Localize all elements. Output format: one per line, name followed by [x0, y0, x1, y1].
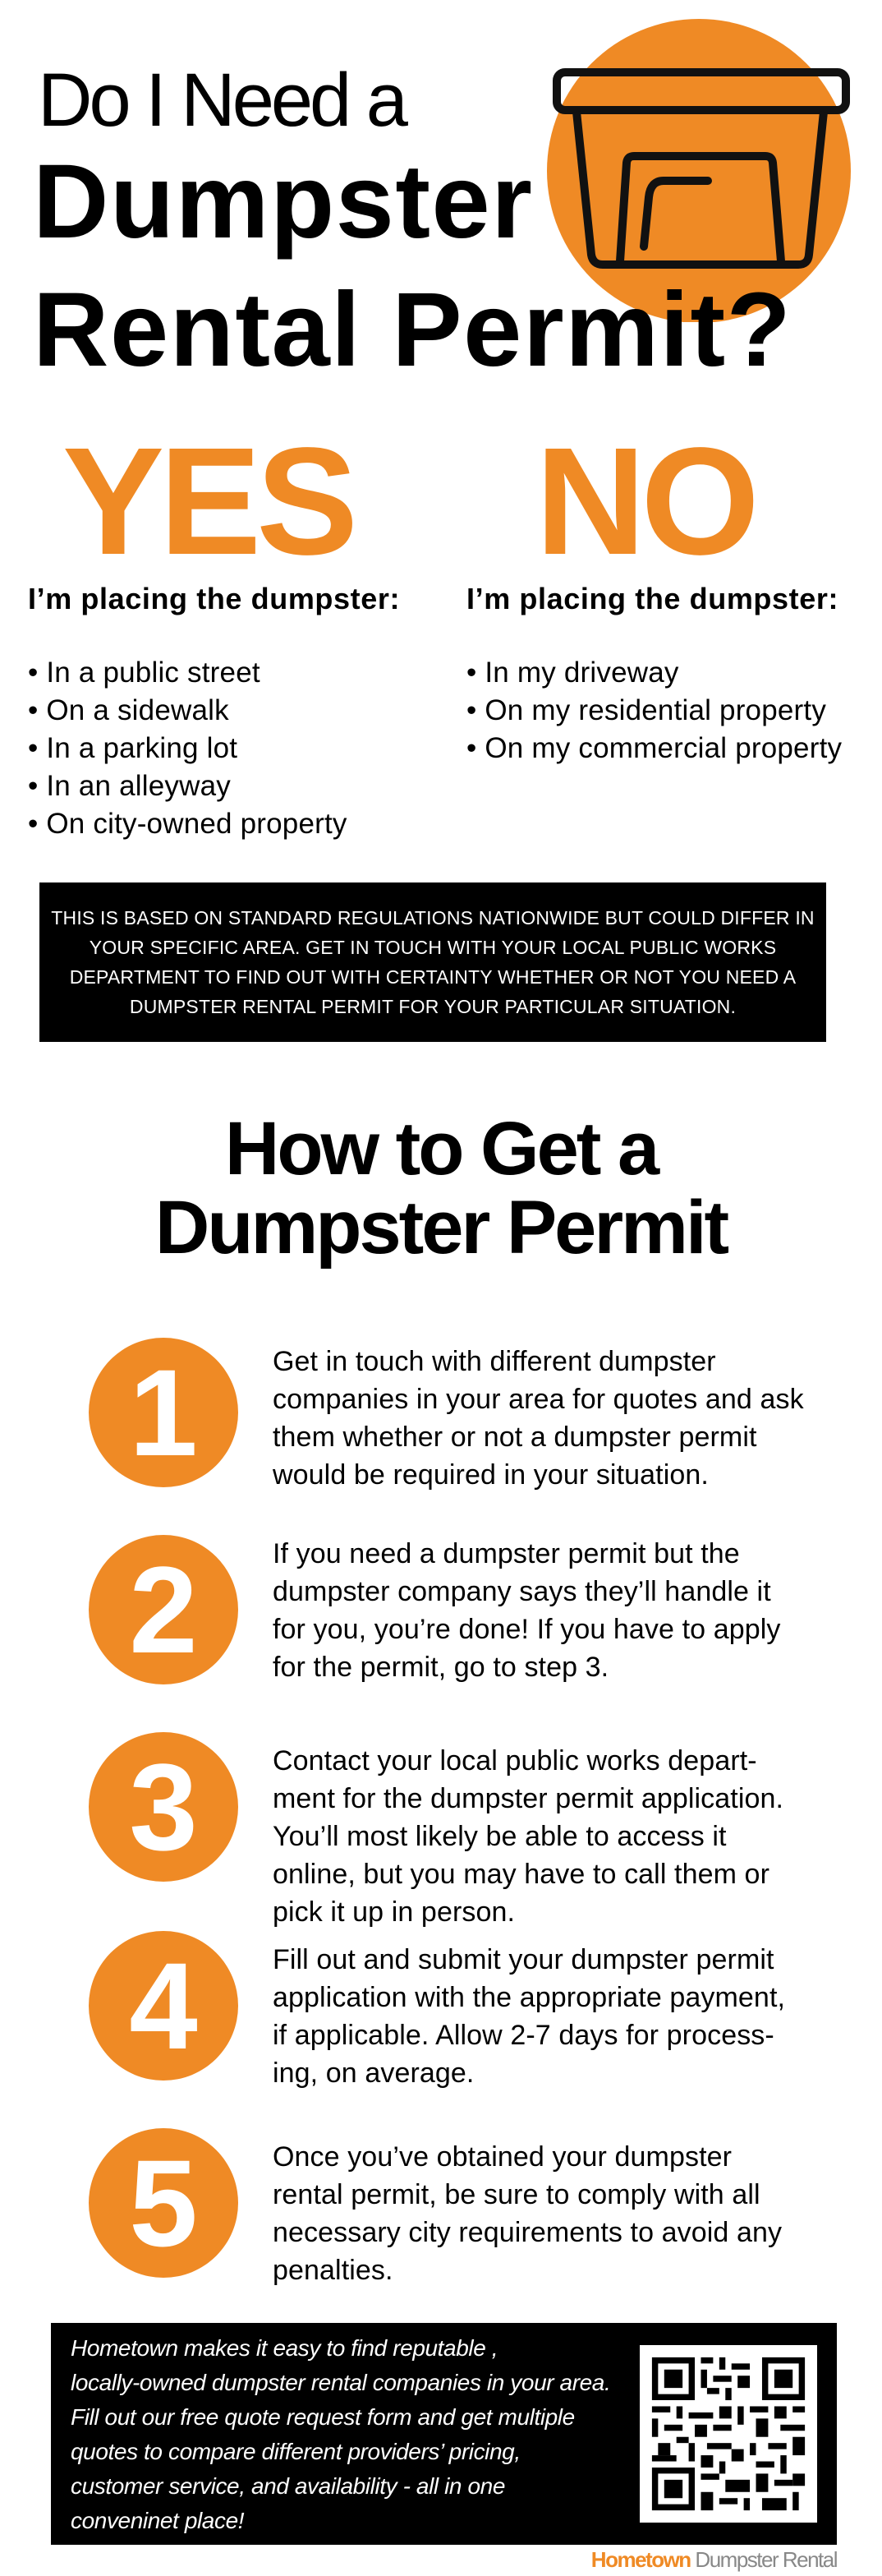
step 4	[89, 1931, 785, 2089]
step 2: If you need a dumpster permit but the	[273, 1538, 740, 1569]
step 2: for you, you’re done! If you have to apply	[273, 1614, 780, 1645]
disclaimer box: THIS IS BASED ON STANDARD REGULATIONS NATIONWIDE BUT COULD DIFFER IN	[51, 907, 815, 929]
footer text: conveninet place!	[71, 2508, 244, 2533]
panel: no list	[466, 582, 842, 764]
heading: NO: NO	[535, 417, 755, 587]
text: pick it up in person.	[273, 1896, 515, 1928]
step 2: 2	[129, 1541, 198, 1679]
step 2	[89, 1535, 780, 1684]
heading: how to get a dumpster permit	[155, 1107, 728, 1270]
panel: yes list	[28, 582, 400, 840]
panel: yes list: • In a public street	[28, 657, 260, 689]
footer text: locally-owned dumpster rental companies in your area.	[71, 2370, 610, 2395]
heading: how to get a dumpster permit: Dumpster Permit	[155, 1186, 727, 1270]
heading: how to get a dumpster permit: How to Get a	[225, 1107, 657, 1191]
panel: yes list: • On a sidewalk	[28, 694, 229, 726]
step 1: them whether or not a dumpster permit	[273, 1422, 757, 1453]
disclaimer box: DEPARTMENT TO FIND OUT WITH CERTAINTY WHETHER OR NOT YOU NEED A	[70, 966, 796, 988]
step 3: 3	[129, 1738, 198, 1876]
step 3: Contact your local public works depart-	[273, 1745, 757, 1776]
footer text: quotes to compare different providers’ pricing,	[71, 2439, 521, 2464]
title	[33, 58, 792, 389]
step 1: would be required in your situation.	[273, 1459, 709, 1491]
footer box	[51, 2323, 837, 2545]
title: Dumpster	[33, 143, 533, 260]
panel: no list: I’m placing the dumpster:	[466, 582, 838, 615]
icon: orange circle with dumpster	[547, 19, 851, 322]
footer text	[71, 2335, 610, 2533]
heading: YES: YES	[62, 417, 353, 587]
step 1: companies in your area for quotes and ask	[273, 1384, 804, 1415]
footer text: customer service, and availability - all in one	[71, 2473, 505, 2499]
panel: yes list: • On city-owned property	[28, 808, 347, 840]
panel: yes list: I’m placing the dumpster:	[28, 582, 400, 615]
step 1: Get in touch with different dumpster	[273, 1346, 716, 1377]
step 5: penalties.	[273, 2255, 393, 2286]
disclaimer box: DUMPSTER RENTAL PERMIT FOR YOUR PARTICULAR SITUATION.	[130, 996, 736, 1017]
panel: no list: • In my driveway	[466, 657, 679, 689]
step 2: dumpster company says they’ll handle it	[273, 1576, 771, 1607]
panel: yes list: • In a parking lot	[28, 732, 237, 764]
step 4: Fill out and submit your dumpster permit	[273, 1944, 774, 1975]
step 5: necessary city requirements to avoid any	[273, 2217, 782, 2248]
footer text: Fill out our free quote request form and get multiple	[71, 2404, 575, 2430]
step 4: ing, on average.	[273, 2058, 474, 2089]
step 3: ment for the dumpster permit application.	[273, 1783, 783, 1814]
disclaimer box	[39, 882, 826, 1042]
step 1	[89, 1338, 804, 1491]
text: • On my commercial property	[466, 732, 842, 764]
step 4: 4	[129, 1937, 198, 2075]
title: Do I Need a	[38, 58, 405, 142]
panel: no list: • On my residential property	[466, 694, 826, 726]
QR code	[640, 2345, 817, 2523]
disclaimer box: YOUR SPECIFIC AREA. GET IN TOUCH WITH YOUR LOCAL PUBLIC WORKS	[90, 937, 776, 958]
step 1: 1	[129, 1343, 198, 1482]
step 5: 5	[129, 2134, 198, 2272]
step 2: for the permit, go to step 3.	[273, 1652, 609, 1683]
brand logo: Hometown Dumpster Rental	[591, 2547, 837, 2572]
step 5: rental permit, be sure to comply with all	[273, 2179, 760, 2210]
step 5: Once you’ve obtained your dumpster	[273, 2141, 732, 2173]
step 4: if applicable. Allow 2-7 days for process-	[273, 2020, 774, 2051]
step 3	[89, 1732, 783, 1928]
step 3: online, but you may have to call them or	[273, 1859, 769, 1890]
title: Rental Permit?	[33, 271, 792, 389]
step 3: You’ll most likely be able to access it	[273, 1821, 727, 1852]
panel: yes list: • In an alleyway	[28, 770, 231, 802]
step 5	[89, 2128, 782, 2286]
step 4: application with the appropriate payment,	[273, 1982, 785, 2013]
footer text: Hometown makes it easy to find reputable ,	[71, 2335, 498, 2361]
